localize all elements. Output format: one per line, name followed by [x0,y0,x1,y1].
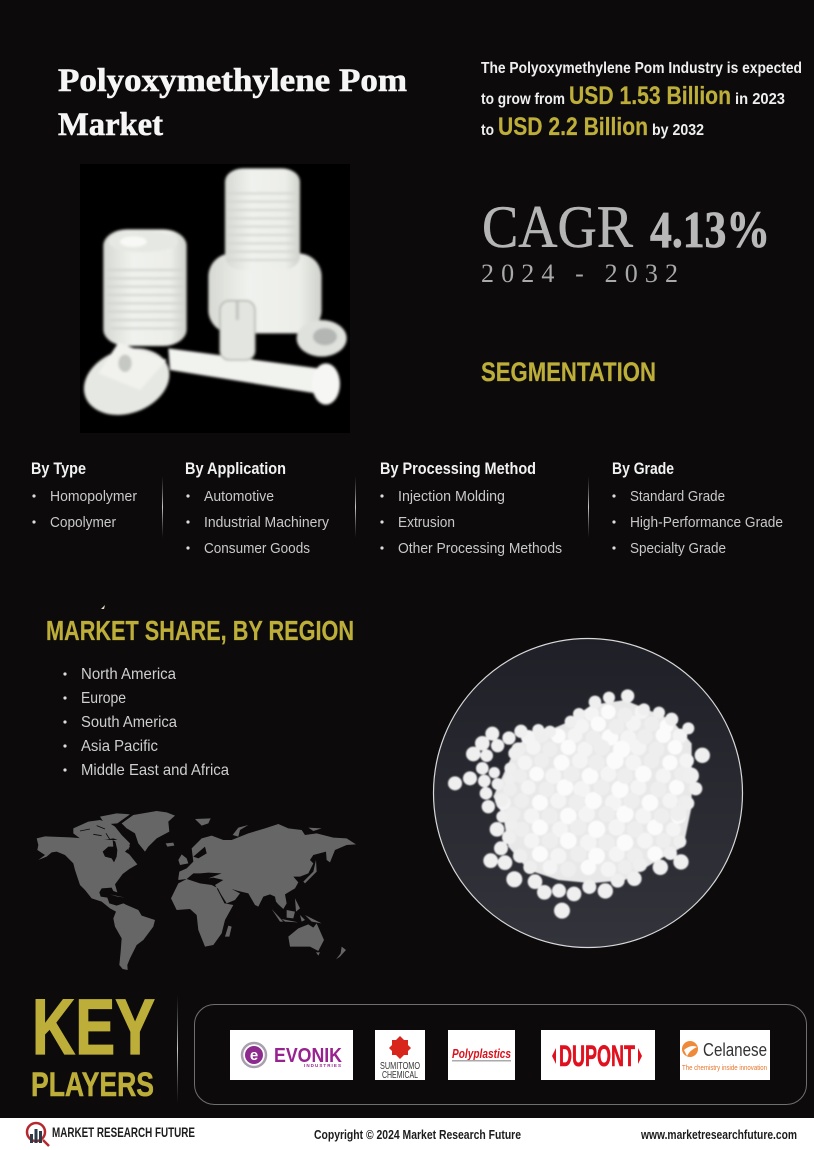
logo: sumitomo chemical [375,1030,425,1081]
right threaded bolt [208,168,322,333]
left threaded cylinder [103,229,187,346]
logo: sumitomo chemical: CHEMICAL [382,1070,418,1081]
column: by grade: High-Performance Grade [630,514,783,531]
logo: evonik: e [250,1047,258,1064]
region list: Middle East and Africa [81,762,229,779]
washer ring [297,320,347,357]
market size statement: to [481,122,494,139]
region list: South America [81,714,177,731]
column: by processing method: Other Processing Methods [398,540,562,557]
key players panel [194,1004,806,1104]
column: by type [31,459,137,531]
loose pellets [448,689,710,919]
world map [37,811,356,970]
region list [63,666,229,779]
market size statement: USD 1.53 Billion [569,82,731,110]
column: by type: Copolymer [50,514,116,531]
key players heading: PLAYERS [31,1066,154,1104]
footer brand: MARKET RESEARCH FUTURE [52,1125,195,1140]
long screw [168,348,318,393]
small screw [220,301,255,360]
footer [0,1118,814,1150]
pellet pile [493,700,692,883]
logo: polyplastics: Polyplastics [452,1046,511,1061]
footer logo icon [27,1123,49,1146]
market size statement: to grow from [481,91,565,108]
logo: dupont: DUPONT [559,1040,635,1073]
logo: evonik: INDUSTRIES [304,1063,341,1068]
pellet photo circle [434,638,742,948]
market size statement: USD 2.2 Billion [498,113,648,141]
column: by grade: Specialty Grade [630,540,726,557]
column: by application: Industrial Machinery [204,514,329,531]
column: by grade: By Grade [612,459,674,478]
logo: sumitomo chemical: SUMITOMO [380,1061,420,1072]
logo: celanese: Celanese [703,1040,767,1060]
CAGR: 4.13% [650,202,770,259]
heading: segmentation: SEGMENTATION [481,357,656,387]
pile pellets [496,705,694,877]
heading: market share by region: MARKET SHARE, BY REGION [46,615,354,646]
column: by type: Homopolymer [50,488,137,505]
heading: market share by region [46,605,354,646]
CAGR: CAGR [482,194,633,260]
region list: Europe [81,690,126,707]
CAGR [481,194,770,288]
column: by application: By Application [185,459,286,478]
logo: evonik [230,1030,353,1080]
segmentation columns [31,459,783,557]
key players heading [31,982,155,1104]
market size statement [481,60,802,141]
region list: North America [81,666,176,683]
CAGR: 2024 - 2032 [481,259,678,288]
title: Polyoxymethylene Pom [58,63,407,99]
product photo: POM parts [74,164,350,433]
logo: celanese: The chemistry inside innovation [682,1063,767,1072]
column: by processing method: Extrusion [398,514,455,531]
column: by type: By Type [31,459,86,478]
region list: Asia Pacific [81,738,158,755]
title [58,63,407,143]
column: by application: Consumer Goods [204,540,310,557]
logo: dupont [541,1030,655,1080]
column: by grade [612,459,783,557]
americas and greenland [37,811,175,970]
logo: evonik: EVONIK [274,1045,342,1067]
logo: celanese [680,1030,770,1080]
column: by application [185,459,329,557]
flat nut [74,337,179,426]
column: by processing method: By Processing Method [380,459,536,478]
logo: polyplastics [448,1030,515,1080]
market size statement: in 2023 [735,91,785,108]
footer copyright: Copyright © 2024 Market Research Future [314,1127,521,1142]
title: Market [58,107,163,143]
column: by processing method [380,459,562,557]
key players heading: KEY [32,982,155,1071]
eurasia, africa and oceania [171,818,356,959]
market size statement: by 2032 [652,122,704,139]
column: by grade: Standard Grade [630,488,725,505]
column: by processing method: Injection Molding [398,488,505,505]
column: by application: Automotive [204,488,274,505]
